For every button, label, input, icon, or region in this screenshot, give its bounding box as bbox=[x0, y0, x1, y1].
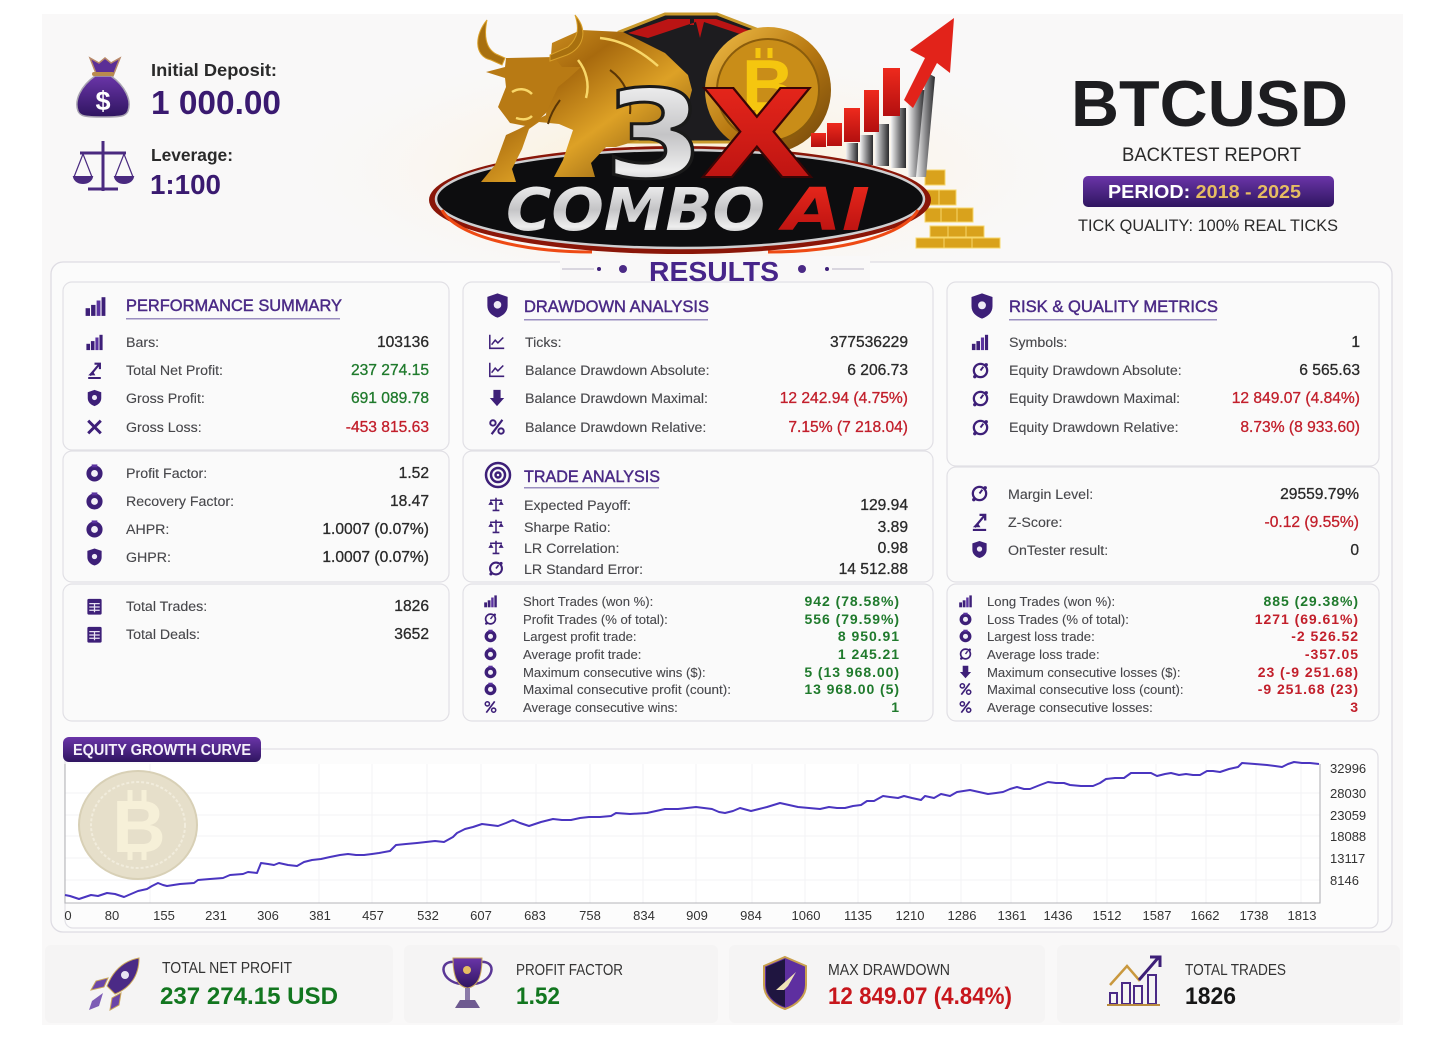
row: maximal consecutive loss bbox=[960, 681, 1359, 697]
x axis labels: 1662 bbox=[1191, 908, 1219, 923]
heading: risk and quality: RISK & QUALITY METRICS bbox=[1009, 297, 1218, 316]
row: z-score bbox=[973, 514, 1359, 531]
heading: performance summary bbox=[86, 296, 342, 320]
panel: performance summary bbox=[63, 282, 449, 450]
row: recovery factor bbox=[86, 492, 429, 510]
row: loss trades: 1271 (69.61%) bbox=[1255, 611, 1359, 627]
row: profit factor: 1.52 bbox=[399, 465, 429, 482]
row: total trades: Total Trades: bbox=[126, 599, 207, 615]
row: equity drawdown relative: Equity Drawdown Relative: bbox=[1009, 420, 1179, 436]
row: total deals: 3652 bbox=[394, 626, 429, 643]
value: 12 849.07 (4.84%) bbox=[828, 983, 1012, 1010]
row: maximal consecutive profit bbox=[485, 681, 900, 697]
row: recovery factor: Recovery Factor: bbox=[126, 494, 234, 510]
row: total deals bbox=[87, 626, 429, 643]
row: total net profit: 237 274.15 bbox=[351, 362, 429, 379]
row: equity drawdown absolute: Equity Drawdown Absolute: bbox=[1009, 363, 1182, 379]
bull bbox=[478, 15, 692, 182]
row: balance drawdown relative: Balance Drawdown Relative: bbox=[525, 420, 706, 436]
icon: balance scale bbox=[74, 141, 133, 191]
red shield chevron bbox=[628, 19, 756, 38]
x axis labels: 607 bbox=[470, 908, 492, 923]
label: TOTAL NET PROFIT bbox=[162, 960, 293, 977]
row: margin level bbox=[972, 486, 1359, 503]
bitcoin watermark bbox=[79, 771, 197, 879]
y axis labels: 8146 bbox=[1330, 873, 1359, 888]
row: equity drawdown relative: 8.73% (8 933.60) bbox=[1240, 419, 1360, 436]
bitcoin watermark: B bbox=[112, 785, 166, 868]
panel: profit trades bbox=[463, 584, 933, 721]
row: equity drawdown maximal bbox=[973, 390, 1360, 407]
row: maximal consecutive loss: -9 251.68 (23) bbox=[1258, 681, 1359, 697]
bull head bbox=[486, 57, 581, 127]
row: AHPR: 1.0007 (0.07%) bbox=[322, 521, 429, 538]
row: symbols bbox=[972, 334, 1360, 351]
row: gross loss: -453 815.63 bbox=[346, 419, 429, 436]
shield backdrop bbox=[619, 14, 764, 142]
row: expected payoff: Expected Payoff: bbox=[524, 498, 631, 514]
chart title pill: EQUITY GROWTH CURVE bbox=[73, 742, 251, 759]
row: maximum consecutive wins: 5 (13 968.00) bbox=[804, 664, 900, 680]
y axis labels: 13117 bbox=[1330, 851, 1365, 866]
row: profit factor bbox=[86, 464, 429, 482]
bull horns bbox=[478, 15, 583, 65]
row: ticks: 377536229 bbox=[830, 334, 908, 351]
value: 1.52 bbox=[516, 983, 560, 1010]
y axis labels: 18088 bbox=[1330, 829, 1366, 844]
row: symbols: Symbols: bbox=[1009, 335, 1067, 351]
leverage label: Leverage: bbox=[151, 145, 233, 165]
x axis labels: 1361 bbox=[998, 908, 1026, 923]
x axis labels: 1436 bbox=[1044, 908, 1072, 923]
row: average loss trade: Average loss trade: bbox=[987, 647, 1100, 662]
row: total trades: 1826 bbox=[394, 598, 429, 615]
icon: shield bbox=[764, 957, 806, 1009]
row: average loss trade: -357.05 bbox=[1305, 646, 1359, 662]
heading: risk and quality bbox=[972, 293, 1218, 320]
row: gross profit: 691 089.78 bbox=[351, 390, 429, 407]
row: largest loss trade: Largest loss trade: bbox=[987, 629, 1095, 644]
hero glow bbox=[260, 35, 1120, 305]
row: ticks bbox=[490, 334, 908, 351]
period pill bbox=[1083, 176, 1334, 207]
panel: trade analysis bbox=[463, 451, 933, 582]
row: profit trades: Profit Trades (% of total): bbox=[523, 612, 668, 627]
panel: margin metrics bbox=[947, 467, 1379, 582]
value: 1826 bbox=[1185, 983, 1236, 1010]
row: maximum consecutive losses bbox=[960, 664, 1359, 680]
row: largest profit trade: Largest profit trade: bbox=[523, 629, 637, 644]
heading: drawdown analysis: DRAWDOWN ANALYSIS bbox=[524, 297, 709, 316]
panel: loss trades bbox=[947, 584, 1379, 721]
leverage value: 1:100 bbox=[150, 169, 221, 200]
row: z-score: Z-Score: bbox=[1008, 515, 1062, 531]
card: profit factor bbox=[404, 945, 718, 1023]
row: profit factor: Profit Factor: bbox=[126, 466, 207, 482]
icon: growth chart bbox=[1107, 957, 1160, 1006]
row: long trades: 885 (29.38%) bbox=[1264, 593, 1359, 609]
value: 237 274.15 USD bbox=[160, 983, 338, 1010]
AI wordmark: AI bbox=[778, 175, 870, 244]
row: short trades bbox=[484, 593, 900, 609]
row: ontester result: 0 bbox=[1350, 542, 1359, 559]
row: average consecutive wins: Average consecutive wins: bbox=[523, 700, 678, 715]
row: LR standard error bbox=[489, 561, 908, 578]
results heading: RESULTS bbox=[649, 256, 779, 287]
logo number 3: 3 bbox=[604, 64, 704, 206]
row: loss trades: Loss Trades (% of total): bbox=[987, 612, 1129, 627]
row: ticks: Ticks: bbox=[525, 335, 562, 351]
card: max drawdown bbox=[729, 945, 1045, 1023]
row: margin level: 29559.79% bbox=[1280, 486, 1359, 503]
row: average consecutive wins bbox=[485, 699, 900, 715]
row: maximal consecutive profit: Maximal consecutive profit (count): bbox=[523, 682, 731, 697]
x axis labels: 1512 bbox=[1093, 908, 1121, 923]
row: gross profit bbox=[88, 390, 429, 407]
chart plot area bbox=[65, 764, 1320, 903]
y axis labels: 32996 bbox=[1330, 761, 1366, 776]
row: average profit trade bbox=[485, 646, 900, 662]
heading: trade analysis bbox=[486, 463, 660, 488]
card: total net profit bbox=[45, 945, 393, 1023]
row: ontester result: OnTester result: bbox=[1008, 543, 1108, 559]
row: equity drawdown maximal: 12 849.07 (4.84%) bbox=[1232, 390, 1360, 407]
equity line bbox=[65, 762, 1319, 899]
row: bars: Bars: bbox=[126, 335, 159, 351]
row: balance drawdown maximal bbox=[490, 390, 908, 407]
row: symbols: 1 bbox=[1351, 334, 1360, 351]
x axis labels: 683 bbox=[524, 908, 546, 923]
row: z-score: -0.12 (9.55%) bbox=[1265, 514, 1359, 531]
row: average consecutive losses: Average consecutive losses: bbox=[987, 700, 1153, 715]
row: average loss trade bbox=[960, 646, 1359, 662]
label: TOTAL TRADES bbox=[1185, 962, 1286, 979]
panel: factors bbox=[63, 451, 449, 582]
row: AHPR: AHPR: bbox=[126, 522, 169, 538]
row: loss trades bbox=[960, 611, 1359, 627]
row: maximum consecutive losses: 23 (-9 251.68) bbox=[1258, 664, 1359, 680]
x axis labels: 909 bbox=[686, 908, 708, 923]
row: expected payoff bbox=[488, 497, 908, 514]
row: sharpe ratio bbox=[488, 519, 908, 536]
row: maximal consecutive loss: Maximal consecutive loss (count): bbox=[987, 682, 1183, 697]
row: total trades bbox=[87, 598, 429, 615]
row: short trades: Short Trades (won %): bbox=[523, 594, 653, 609]
chart title pill bbox=[63, 737, 261, 762]
x axis labels: 457 bbox=[362, 908, 384, 923]
row: LR correlation: 0.98 bbox=[878, 540, 908, 557]
row: gross profit: Gross Profit: bbox=[126, 391, 205, 407]
x axis labels: 1738 bbox=[1240, 908, 1268, 923]
row: largest profit trade: 8 950.91 bbox=[838, 628, 900, 644]
heading: drawdown analysis bbox=[487, 293, 709, 320]
row: total deals: Total Deals: bbox=[126, 627, 200, 643]
icon: rocket bbox=[89, 958, 139, 1010]
row: long trades: Long Trades (won %): bbox=[987, 594, 1115, 609]
heading: trade analysis: TRADE ANALYSIS bbox=[524, 467, 660, 486]
x axis labels: 1813 bbox=[1288, 908, 1316, 923]
row: balance drawdown absolute: Balance Drawdown Absolute: bbox=[525, 363, 710, 379]
x axis labels: 532 bbox=[417, 908, 439, 923]
bitcoin coin bbox=[705, 27, 831, 153]
x axis labels: 758 bbox=[579, 908, 601, 923]
grey chart bars bbox=[846, 72, 935, 177]
icon: money bag bbox=[77, 58, 129, 117]
heading: performance summary: PERFORMANCE SUMMARY bbox=[126, 296, 342, 315]
row: margin level: Margin Level: bbox=[1008, 487, 1093, 503]
row: largest loss trade bbox=[960, 628, 1359, 644]
title BTCUSD: BTCUSD bbox=[1071, 67, 1348, 140]
COMBO wordmark: COMBO bbox=[506, 175, 765, 244]
row: equity drawdown maximal: Equity Drawdown Maximal: bbox=[1009, 391, 1180, 407]
row: GHPR bbox=[87, 548, 429, 566]
row: expected payoff: 129.94 bbox=[860, 497, 908, 514]
row: average profit trade: Average profit trade: bbox=[523, 647, 641, 662]
row: balance drawdown maximal: 12 242.94 (4.75%) bbox=[780, 390, 908, 407]
results outer frame bbox=[51, 262, 1392, 932]
bull highlights bbox=[512, 38, 658, 119]
deposit and leverage block bbox=[74, 58, 281, 200]
row: average profit trade: 1 245.21 bbox=[838, 646, 900, 662]
row: balance drawdown absolute: 6 206.73 bbox=[847, 362, 908, 379]
row: short trades: 942 (78.58%) bbox=[805, 593, 900, 609]
row: balance drawdown relative: 7.15% (7 218.04) bbox=[788, 419, 908, 436]
row: gross loss bbox=[88, 419, 429, 436]
row: ontester result bbox=[972, 541, 1359, 559]
row: LR standard error: 14 512.88 bbox=[839, 561, 908, 578]
x axis labels: 155 bbox=[153, 908, 175, 923]
x axis labels: 984 bbox=[740, 908, 762, 923]
row: average consecutive wins: 1 bbox=[891, 699, 900, 715]
y axis labels: 28030 bbox=[1330, 786, 1366, 801]
x axis labels bbox=[64, 908, 1316, 923]
row: equity drawdown absolute: 6 565.63 bbox=[1299, 362, 1360, 379]
panel: drawdown analysis bbox=[463, 282, 933, 450]
results heading bbox=[560, 256, 870, 287]
y axis labels: 23059 bbox=[1330, 808, 1366, 823]
x axis labels: 306 bbox=[257, 908, 279, 923]
y axis labels bbox=[1330, 761, 1366, 888]
red rising bars bbox=[811, 68, 900, 147]
report title block bbox=[1071, 67, 1348, 235]
row: long trades bbox=[959, 593, 1359, 609]
row: total net profit: Total Net Profit: bbox=[126, 363, 223, 379]
x axis labels: 1286 bbox=[948, 908, 976, 923]
label: MAX DRAWDOWN bbox=[828, 962, 950, 979]
row: sharpe ratio: 3.89 bbox=[878, 519, 908, 536]
icon: trophy bbox=[444, 958, 491, 1008]
row: maximal consecutive profit: 13 968.00 (5) bbox=[804, 681, 900, 697]
row: maximum consecutive wins bbox=[485, 664, 900, 680]
panel: trades totals bbox=[63, 584, 449, 721]
card: total trades bbox=[1057, 945, 1400, 1023]
row: largest profit trade bbox=[485, 628, 900, 644]
row: balance drawdown absolute bbox=[490, 362, 908, 379]
x axis labels: 1587 bbox=[1143, 908, 1171, 923]
row: LR correlation: LR Correlation: bbox=[524, 541, 619, 557]
x axis labels: 1060 bbox=[792, 908, 820, 923]
bull body and legs bbox=[481, 30, 692, 182]
row: profit trades bbox=[485, 611, 900, 627]
x axis labels: 231 bbox=[205, 908, 227, 923]
row: recovery factor: 18.47 bbox=[390, 493, 429, 510]
panel: equity growth curve bbox=[63, 737, 1378, 928]
row: bars: 103136 bbox=[377, 334, 429, 351]
x axis labels: 0 bbox=[64, 908, 72, 923]
row: maximum consecutive wins: Maximum consecutive wins ($): bbox=[523, 665, 706, 680]
gold bars pile bbox=[916, 170, 1000, 248]
row: balance drawdown maximal: Balance Drawdown Maximal: bbox=[525, 391, 708, 407]
tick quality: TICK QUALITY: 100% REAL TICKS bbox=[1078, 216, 1338, 235]
initial deposit value: 1 000.00 bbox=[151, 84, 281, 121]
row: LR standard error: LR Standard Error: bbox=[524, 562, 643, 578]
row: GHPR: 1.0007 (0.07%) bbox=[322, 549, 429, 566]
x axis labels: 80 bbox=[105, 908, 119, 923]
x axis labels: 1135 bbox=[844, 908, 872, 923]
row: AHPR bbox=[86, 520, 429, 538]
row: average consecutive losses bbox=[960, 699, 1359, 715]
row: profit trades: 556 (79.59%) bbox=[805, 611, 900, 627]
initial deposit label: Initial Deposit: bbox=[151, 60, 277, 80]
row: largest loss trade: -2 526.52 bbox=[1291, 628, 1359, 644]
row: balance drawdown relative bbox=[490, 419, 908, 436]
bitcoin coin: B bbox=[742, 46, 794, 126]
black oval badge bbox=[429, 146, 931, 254]
row: sharpe ratio: Sharpe Ratio: bbox=[524, 520, 611, 536]
hero logo: 3X Combo AI bbox=[429, 14, 1000, 254]
logo letter X: X bbox=[700, 64, 814, 206]
x axis labels: 834 bbox=[633, 908, 655, 923]
period pill: PERIOD: 2018 - 2025 bbox=[1108, 182, 1301, 202]
row: GHPR: GHPR: bbox=[126, 550, 171, 566]
row: total net profit bbox=[88, 362, 429, 379]
row: LR correlation bbox=[488, 540, 908, 557]
icon: money bag: $ bbox=[95, 86, 111, 116]
row: average consecutive losses: 3 bbox=[1350, 699, 1359, 715]
label: PROFIT FACTOR bbox=[516, 962, 623, 979]
x axis labels: 381 bbox=[309, 908, 331, 923]
x axis labels: 1210 bbox=[896, 908, 924, 923]
row: equity drawdown relative bbox=[973, 419, 1360, 436]
red arrow bbox=[904, 18, 954, 108]
row: maximum consecutive losses: Maximum consecutive losses ($): bbox=[987, 665, 1181, 680]
panel: risk and quality metrics bbox=[947, 282, 1379, 466]
row: equity drawdown absolute bbox=[973, 362, 1360, 379]
row: gross loss: Gross Loss: bbox=[126, 420, 202, 436]
subtitle: BACKTEST REPORT bbox=[1122, 145, 1301, 166]
row: bars bbox=[86, 334, 429, 351]
